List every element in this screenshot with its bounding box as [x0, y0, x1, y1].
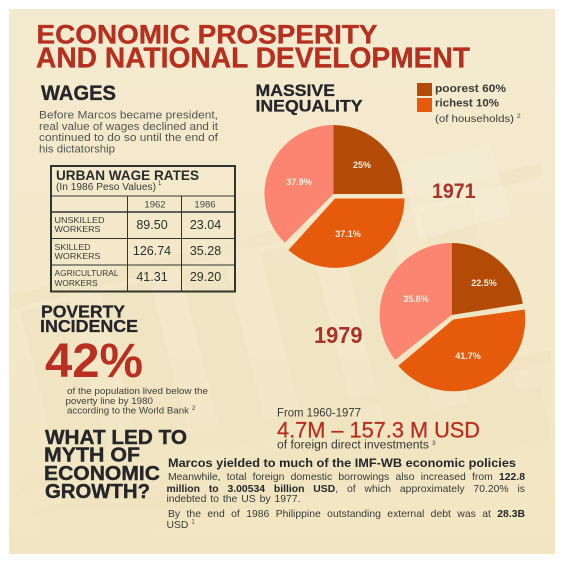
massive inequality heading — [256, 81, 363, 116]
table: urban wage rates: 35.28 — [190, 244, 221, 258]
what led to heading: WHAT LED TO — [45, 427, 187, 449]
poverty description — [66, 386, 208, 417]
debt paragraph — [166, 472, 525, 531]
debt paragraph: By the end of 1986 Philippine outstanding external debt was at 28.3B — [168, 509, 525, 520]
massive inequality heading: MASSIVE — [256, 81, 335, 100]
table: urban wage rates: WORKERS — [54, 224, 101, 234]
table: urban wage rates — [51, 166, 235, 292]
poverty description: according to the World Bank — [67, 406, 189, 417]
table: urban wage rates: 23.04 — [190, 218, 221, 232]
poverty incidence heading: INCIDENCE — [40, 316, 138, 336]
what led to heading: MYTH OF — [44, 445, 140, 467]
pie chart 1979: 41.7% — [455, 351, 481, 361]
table: urban wage rates: 1986 — [194, 200, 216, 210]
year label 1979: 1979 — [314, 322, 362, 348]
title — [36, 20, 471, 74]
legend: 2 — [517, 113, 521, 120]
pie chart 1971: 25% — [353, 160, 371, 170]
legend — [417, 83, 521, 125]
foreign investment stat: 4.7M – 157.3 M USD — [277, 418, 480, 443]
wages heading: WAGES — [41, 82, 116, 105]
table: urban wage rates: 1 — [158, 181, 162, 187]
foreign investment stat — [277, 408, 480, 452]
title: ECONOMIC PROSPERITY — [36, 20, 378, 50]
debt paragraph: USD 1 — [166, 520, 195, 531]
table: urban wage rates: 1962 — [144, 200, 166, 210]
wages paragraph: continued to do so until the end of — [39, 132, 219, 144]
what led to heading: ECONOMIC — [44, 463, 160, 485]
debt paragraph: million to 3.00534 billion USD, of which approximately 70.20% is — [166, 484, 525, 494]
poverty incidence heading: POVERTY — [41, 302, 125, 322]
wages paragraph: Before Marcos became president, — [39, 110, 218, 122]
table: urban wage rates: (In 1986 Peso Values) — [56, 182, 156, 193]
foreign investment stat: From 1960-1977 — [277, 408, 361, 420]
table: urban wage rates: 89.50 — [136, 218, 168, 232]
wages paragraph: real value of wages declined and it — [39, 121, 218, 133]
pie chart 1971: 37.9% — [286, 177, 312, 187]
massive inequality heading: INEQUALITY — [256, 97, 363, 116]
what led to heading — [44, 427, 187, 503]
table: urban wage rates: WORKERS — [54, 278, 98, 288]
table: urban wage rates: UNSKILLED — [54, 215, 104, 225]
foreign investment stat: 3 — [432, 440, 436, 447]
debt paragraph: Meanwhile, total foreign domestic borrowings also increased from 122.8 — [168, 472, 525, 483]
title: AND NATIONAL DEVELOPMENT — [36, 42, 471, 74]
foreign investment stat: of foreign direct investments — [277, 440, 429, 452]
year label 1971: 1971 — [432, 180, 476, 203]
poverty stat 42%: 42% — [45, 335, 143, 388]
table: urban wage rates: 41.31 — [136, 270, 168, 284]
table: urban wage rates: 126.74 — [133, 244, 171, 258]
pie chart 1971 — [264, 125, 404, 268]
pie chart 1979 — [380, 243, 525, 391]
what led to heading: GROWTH? — [45, 481, 150, 503]
pie chart 1979: 35.8% — [403, 294, 429, 304]
table: urban wage rates: 29.20 — [190, 270, 221, 284]
table: urban wage rates: URBAN WAGE RATES — [56, 167, 199, 183]
wages paragraph: his dictatorship — [39, 144, 115, 156]
table: urban wage rates: SKILLED — [54, 242, 90, 252]
table: urban wage rates: WORKERS — [54, 251, 101, 261]
legend: richest 10% — [435, 98, 499, 110]
table: urban wage rates: AGRICULTURAL — [54, 268, 119, 278]
wages paragraph — [39, 110, 219, 156]
poverty incidence heading — [40, 302, 138, 336]
poverty description: poverty line by 1980 — [66, 396, 153, 407]
pie chart 1971: 37.1% — [335, 229, 361, 239]
poverty description: 2 — [192, 406, 196, 412]
pie chart 1979: 22.5% — [471, 278, 497, 288]
legend: (of households) — [435, 114, 514, 125]
legend: poorest 60% — [435, 83, 506, 95]
marcos heading: Marcos yielded to much of the IMF-WB economic policies — [168, 458, 516, 470]
debt paragraph: indebted to the US by 1977. — [166, 494, 300, 505]
poverty description: of the population lived below the — [67, 386, 208, 397]
